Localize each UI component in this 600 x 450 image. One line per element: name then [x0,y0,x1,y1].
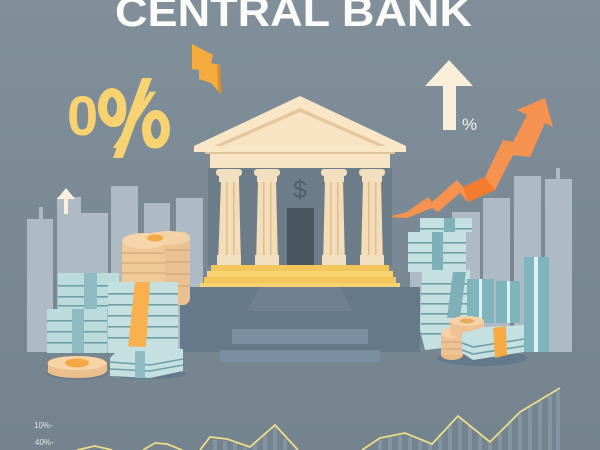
teal bars [467,257,549,352]
up arrow with percent: % [462,115,477,134]
icon: lightning bolt [192,44,221,94]
chart line [77,388,560,450]
line chart [34,388,560,450]
cash stack: right lower [420,270,471,350]
coin: flat [46,356,108,380]
columns [216,169,385,265]
coin stack: left [122,231,190,310]
up arrow with percent [425,60,477,134]
platform [180,287,420,352]
percent symbol: % [98,75,171,166]
cash stack: right upper [408,218,472,272]
dollar sign: $ [293,176,307,204]
temple wall [208,168,392,266]
chart bars [215,391,558,450]
platform steps [220,329,380,362]
axis labels: 10%- [34,421,53,430]
coins and bundle: right front [437,316,527,366]
skyline: right [410,168,572,352]
axis labels: 40%- [35,438,54,447]
temple [194,96,406,287]
door [287,208,314,266]
gold steps [200,265,400,287]
axis labels [34,421,54,447]
percent symbol: 0 [67,84,98,147]
skyline: left [27,186,203,352]
pediment [194,96,406,168]
small up arrow [57,188,75,214]
cash stack: left back [47,273,119,353]
rising orange arrow [388,98,553,218]
cash stack: left front with orange band [108,282,178,353]
cash bundle: front [110,346,186,379]
